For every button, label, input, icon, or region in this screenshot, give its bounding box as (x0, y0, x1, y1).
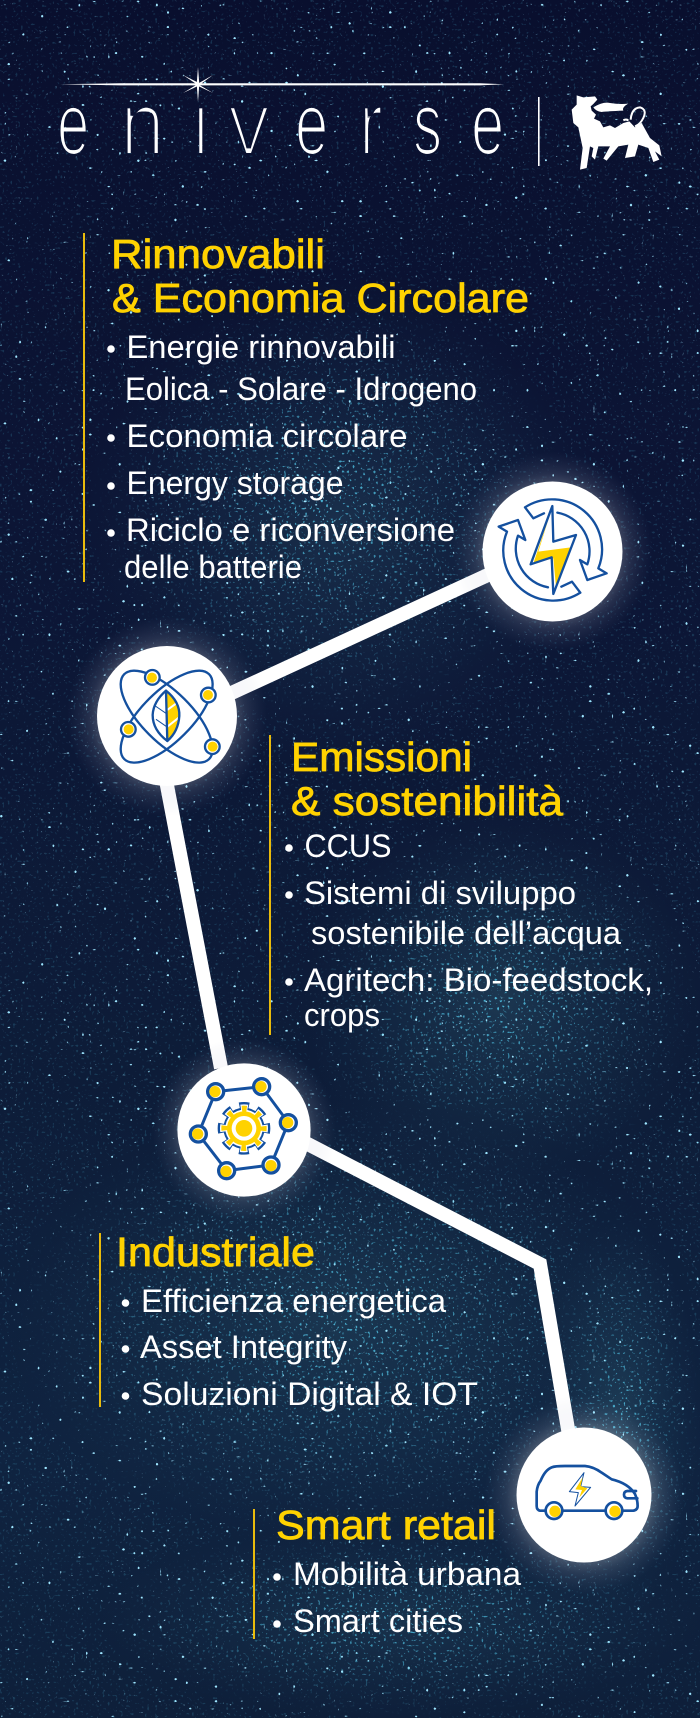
bullet list: delle batterie (124, 549, 302, 585)
wordmark: r (358, 75, 383, 173)
bullet list: Efficienza energetica (141, 1283, 446, 1319)
icon: energy cycle badge (452, 452, 652, 652)
panel: smart retail (254, 1502, 521, 1639)
icon: atom and leaf badge (67, 616, 267, 816)
bullet list: Agritech: Bio-feedstock, (304, 962, 653, 998)
wordmark: e (471, 74, 504, 173)
heading: & sostenibilità (291, 778, 563, 824)
connector: gear to car (300, 1140, 569, 1435)
icon: eni six-legged dog (572, 95, 662, 170)
heading: & Economia Circolare (112, 275, 529, 321)
connector: energy to atom (225, 574, 490, 696)
bullet list: Soluzioni Digital & IOT (141, 1376, 478, 1412)
bullet list: Energie rinnovabili (126, 329, 396, 365)
wordmark: v (228, 75, 270, 173)
bullet list: CCUS (304, 828, 392, 864)
logo: eniverse wordmark with star (57, 67, 662, 173)
wordmark: e (295, 74, 328, 173)
bullet list: crops (304, 997, 380, 1033)
panel: emissioni (270, 734, 653, 1035)
bullet list: Sistemi di sviluppo (304, 875, 576, 911)
wordmark (60, 108, 501, 154)
heading: Rinnovabili (111, 231, 325, 277)
bullet list: Smart cities (293, 1603, 463, 1639)
bullet list (285, 828, 653, 1033)
logo divider (538, 97, 540, 166)
star flare line (60, 67, 504, 102)
bullet list: Mobilità urbana (293, 1556, 521, 1592)
wordmark: s (413, 75, 442, 173)
wordmark: e (57, 75, 89, 173)
panel: industriale (100, 1229, 478, 1412)
bullet list (122, 1283, 478, 1412)
bullet list: Energy storage (126, 465, 344, 501)
icon: electric car badge (484, 1395, 684, 1595)
bullet list: sostenibile dell’acqua (311, 915, 621, 951)
connector: atom to gear (165, 775, 221, 1068)
heading: Emissioni (291, 734, 472, 780)
wordmark: i (192, 74, 210, 173)
heading (111, 231, 529, 321)
bullet list: Asset Integrity (140, 1329, 347, 1365)
bullet list: Riciclo e riconversione (126, 512, 455, 548)
icon: gear network badge (152, 1038, 336, 1222)
bullet list: Eolica - Solare - Idrogeno (125, 371, 477, 407)
heading: Smart retail (276, 1502, 496, 1548)
bullet list: Economia circolare (126, 418, 408, 454)
bullet list (107, 329, 477, 585)
panel: rinnovabili (84, 231, 529, 585)
wordmark: n (120, 74, 165, 173)
heading (291, 734, 563, 824)
connector path between icons (165, 574, 569, 1435)
bullet list (273, 1556, 521, 1639)
heading: Industriale (116, 1229, 315, 1275)
